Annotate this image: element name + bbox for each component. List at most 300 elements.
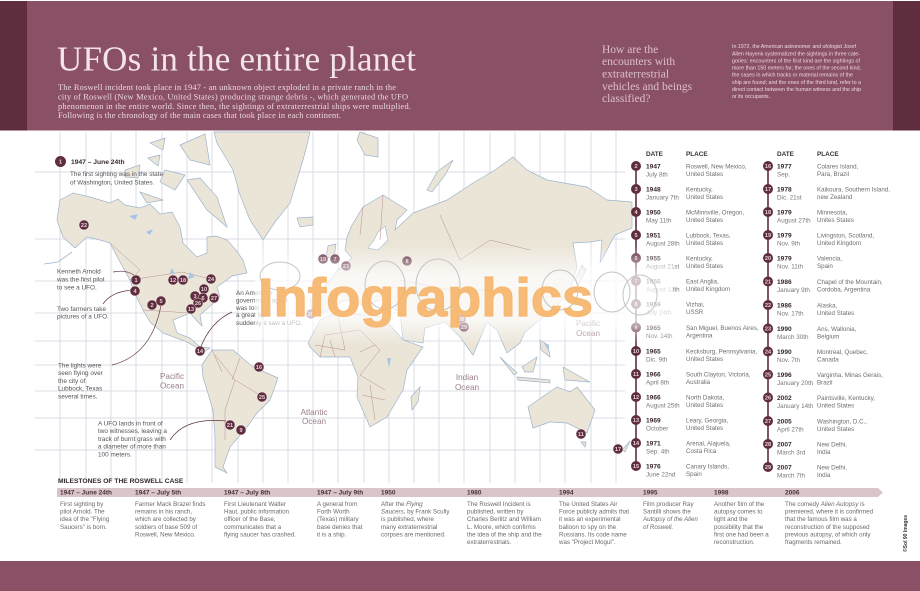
milestone text 7 bbox=[558, 501, 629, 546]
timeline: column two: 26 bbox=[765, 396, 771, 402]
milestone text 5: After the Flying bbox=[381, 501, 423, 508]
image credit: ©Sol 90 Images bbox=[902, 515, 909, 552]
timeline: column one: United States bbox=[686, 402, 723, 409]
milestone text 4: base denies that bbox=[317, 524, 363, 531]
milestone text 7: The United States Air bbox=[559, 501, 617, 508]
Southeast Asia islands bbox=[500, 265, 590, 383]
Aleutian chain bbox=[44, 252, 72, 264]
timeline: column two: Varginha, Minas Gerais, bbox=[817, 372, 883, 379]
timeline: column one: United States bbox=[686, 194, 723, 201]
map markers: 5 bbox=[159, 299, 163, 305]
timeline: column two: New Delhi, bbox=[817, 464, 847, 472]
map markers: 19 bbox=[320, 257, 326, 263]
timeline: column one: Dic. 9th bbox=[646, 356, 668, 364]
milestone text 5: corpses are mentioned. bbox=[381, 532, 446, 538]
milestone text 2: which are collected by bbox=[134, 516, 197, 523]
Africa bbox=[308, 312, 423, 427]
timeline: column one: Sep. 4th bbox=[646, 448, 670, 456]
callout: Kenneth Arnold: Kenneth Arnold bbox=[57, 268, 101, 276]
milestone text 2: Roswell, New Mexico. bbox=[135, 532, 196, 538]
timeline: column two: March 30th bbox=[777, 334, 809, 341]
callout: burnt grass: a diameter of more than bbox=[98, 444, 166, 450]
callout: Lubbock lights: Lubbock, Texas bbox=[58, 386, 102, 392]
subheading question bbox=[602, 44, 693, 105]
timeline: column two: Belgium bbox=[817, 334, 839, 340]
timeline: column one: East Anglia, bbox=[686, 278, 719, 286]
milestone text 2: remains in his ranch, bbox=[135, 508, 192, 516]
milestone text 1 bbox=[60, 501, 110, 531]
milestones of the Roswell case: 1947 – July 8th bbox=[224, 490, 270, 496]
milestone text 10: premiered, where it is confirmed bbox=[785, 508, 874, 516]
milestone text 6: the idea of the ship and the bbox=[467, 532, 542, 538]
timeline: column one: 1955 bbox=[646, 256, 661, 262]
timeline: column two: Nov. 17th bbox=[777, 310, 804, 318]
callout: burnt grass bbox=[98, 420, 226, 458]
milestone text 3: officer of the Base, bbox=[224, 516, 276, 523]
timeline: column one: Argentina bbox=[686, 332, 713, 340]
timeline: column two: 1978 bbox=[777, 186, 792, 194]
timeline: column one: Spain bbox=[686, 471, 702, 478]
timeline: column two: Chapel of the Mountain, bbox=[817, 279, 883, 286]
timeline: column two: Alaska, bbox=[817, 302, 838, 310]
callout: burnt grass: A UFO lands in front of bbox=[98, 420, 163, 428]
timeline: column one: United States bbox=[686, 240, 723, 247]
timeline: column two: 1979 bbox=[777, 256, 792, 262]
timeline: column two: Nov. 11th bbox=[777, 264, 804, 270]
timeline: column two: January 9th bbox=[777, 287, 810, 294]
map markers: 13 bbox=[188, 307, 194, 313]
timeline: column two: new Zealand bbox=[817, 194, 853, 201]
Greenland bbox=[214, 132, 310, 240]
Madagascar bbox=[411, 387, 420, 410]
timeline: column one: 13 bbox=[633, 418, 639, 424]
timeline: column two: 1986 bbox=[777, 279, 792, 286]
timeline: column one: Arenal, Alajuela, bbox=[686, 440, 731, 448]
timeline: column two: Minnesota, bbox=[817, 210, 848, 216]
timeline: column two: March 7th bbox=[777, 472, 805, 480]
milestone text 10 bbox=[785, 501, 874, 546]
timeline: column one: 12 bbox=[633, 395, 639, 401]
timeline: column two: United States bbox=[817, 310, 854, 317]
timeline: column one: McMinnville, Oregon, bbox=[686, 210, 744, 216]
panel: header banner bbox=[0, 1, 920, 130]
timeline: column two: Kaikoura, Southern Island, bbox=[817, 186, 890, 194]
timeline: column two: 1979 bbox=[777, 210, 792, 216]
map markers: 3 bbox=[193, 294, 197, 300]
subheading question: encounters with bbox=[602, 56, 675, 68]
timeline: column two: August 27th bbox=[777, 218, 811, 224]
timeline: column two: 16 bbox=[765, 164, 771, 170]
callout: burnt grass: 100 meters. bbox=[98, 452, 132, 458]
milestone text 8: of Roswell. bbox=[643, 524, 673, 531]
timeline: column two: 21 bbox=[765, 280, 771, 286]
timeline: column two: Paintsville, Kentucky, bbox=[817, 395, 875, 402]
milestones of the Roswell case: 1947 – June 24th bbox=[60, 490, 112, 496]
timeline: column one: 1969 bbox=[646, 418, 661, 424]
milestone text 9: first one had been a bbox=[714, 532, 769, 538]
timeline: column one: January 7th bbox=[646, 194, 679, 202]
timeline: column one: United Kingdom bbox=[686, 286, 730, 293]
timeline: column two: 19 bbox=[765, 233, 771, 239]
milestone text 6 bbox=[467, 501, 542, 546]
timeline: column two: Montreal, Quebec, bbox=[817, 349, 868, 356]
Baltic Sea bbox=[368, 226, 388, 250]
intro text: Following is the chronology of the main cases that took place in each continent. bbox=[58, 111, 341, 120]
milestone text 8 bbox=[642, 501, 698, 531]
callout: first sighting: 1 bbox=[59, 160, 62, 166]
map markers: 10 bbox=[201, 287, 207, 293]
North America bbox=[57, 193, 247, 352]
milestone text 3: flying saucer has crashed. bbox=[224, 532, 296, 538]
timeline: column one: October bbox=[646, 426, 668, 432]
milestone text 9: light and the bbox=[714, 516, 748, 523]
ocean labels: Ocean bbox=[455, 383, 480, 392]
timeline: column two: Livingston, Scotland, bbox=[817, 232, 874, 240]
milestone text 2: soldiers of base 509 of bbox=[135, 524, 198, 531]
subheading question: extraterrestrial bbox=[602, 68, 669, 80]
milestones of the Roswell case: 1950 bbox=[381, 490, 396, 496]
timeline: column two: 25 bbox=[765, 372, 771, 378]
milestone text 1: idea of the "Flying bbox=[60, 516, 110, 523]
classification text: In 1972, the American astronomer and ufologist Josef bbox=[732, 44, 857, 50]
timeline: column two: Unites States bbox=[817, 217, 854, 224]
callout: first sighting bbox=[55, 156, 164, 186]
timeline: column one: 8 bbox=[634, 302, 638, 308]
callout: first sighting: 1947 – June 24th bbox=[71, 159, 125, 166]
callout: first sighting: The first sighting was in the state bbox=[70, 171, 164, 178]
timeline: column two: DATE bbox=[777, 151, 795, 158]
timeline: column one: North Dakota, bbox=[686, 394, 724, 402]
timeline: column two: 1996 bbox=[777, 372, 792, 379]
timeline: column one: July 8th bbox=[646, 172, 668, 178]
timeline: column one: United States bbox=[686, 263, 723, 270]
timeline: column one: 11 bbox=[633, 372, 639, 378]
Eurasia bbox=[310, 157, 632, 355]
classification text: more than 150 meters far; the ones of the second kind, bbox=[732, 66, 861, 72]
timeline: column one: 3 bbox=[634, 187, 638, 193]
timeline: column two: United States bbox=[817, 426, 854, 433]
timeline: column one: Canary Islands, bbox=[686, 464, 729, 470]
map markers: 25 bbox=[259, 395, 265, 401]
world map bbox=[35, 132, 632, 483]
classification text: ship are found; and the ones of the third kind, refer to a bbox=[732, 80, 861, 86]
timeline: column one: 1966 bbox=[646, 372, 661, 378]
map markers: 22 bbox=[81, 223, 87, 229]
milestone text 4 bbox=[317, 501, 363, 538]
timeline: column one: 6 bbox=[634, 256, 638, 262]
timeline: column one: DATE bbox=[646, 151, 664, 158]
callout: American agent: a great light bbox=[236, 312, 270, 319]
map callouts bbox=[55, 156, 302, 458]
subheading question: How are the bbox=[602, 44, 658, 56]
timeline: column one: Kentucky, bbox=[686, 186, 713, 194]
map markers: 23 bbox=[343, 264, 349, 270]
map markers: 14 bbox=[197, 349, 204, 355]
subheading question: classified? bbox=[602, 93, 651, 105]
callout: burnt grass: two witnesses, leaving a bbox=[98, 428, 167, 435]
classification text: gories: encounters of the first kind are the sightings of bbox=[732, 58, 861, 64]
milestone text 1: Saucers" is born. bbox=[60, 524, 107, 531]
map markers bbox=[79, 220, 623, 454]
timeline: column two: United Kingdom bbox=[817, 240, 861, 247]
milestone text 9: possibility that the bbox=[714, 524, 764, 531]
milestones of the Roswell case: 1998 bbox=[714, 490, 729, 496]
timeline: column one: Kentucky, bbox=[686, 256, 713, 262]
milestone text 3: Haut, public information bbox=[224, 508, 290, 516]
milestone text 3: communicates that a bbox=[224, 524, 282, 531]
timeline: column one: 2 bbox=[634, 164, 638, 170]
callout: American agent: suddenly it saw a UFO. bbox=[236, 320, 302, 327]
Lakes bbox=[129, 214, 549, 368]
map markers: 11 bbox=[578, 432, 584, 438]
timeline: column one: April 8th bbox=[646, 380, 670, 386]
callout: Lubbock lights: several times. bbox=[58, 394, 98, 400]
milestones of the Roswell case: 1947 – July 9th bbox=[317, 490, 363, 496]
timeline: column one: 4 bbox=[634, 210, 638, 216]
map markers: 26 bbox=[195, 301, 201, 307]
timeline: column one: PLACE bbox=[686, 151, 708, 158]
milestone text 9: reconstruction. bbox=[714, 539, 755, 546]
map markers: 17 bbox=[615, 447, 621, 453]
callout: two farmers: Two farmers take bbox=[57, 306, 106, 313]
timeline: column one: Australia bbox=[686, 379, 711, 386]
milestone text 8: Film producer Ray bbox=[643, 501, 694, 508]
timeline: column one: South Clayton, Victoria, bbox=[686, 372, 751, 378]
milestones of the Roswell case: 1995 bbox=[643, 490, 658, 496]
timeline: column two: 28 bbox=[765, 442, 771, 448]
timeline: column one: 1976 bbox=[646, 464, 661, 470]
timeline: column two: 24 bbox=[765, 350, 772, 356]
classification text: Allen Hayenk systematized the sightings in three cate- bbox=[732, 52, 860, 58]
intro text: The Roswell incident took place in 1947 - an unknown object exploded in a private ranch in the bbox=[58, 83, 396, 92]
timeline: column one bbox=[631, 151, 759, 478]
timeline: column two: Spain bbox=[817, 263, 833, 270]
timeline: column one: 7 bbox=[634, 279, 638, 285]
timeline: column two: 1977 bbox=[777, 164, 792, 170]
milestones heading: MILESTONES OF THE ROSWELL CASE bbox=[58, 478, 184, 485]
timeline: column one: United States bbox=[686, 356, 723, 363]
ocean labels bbox=[160, 319, 601, 426]
callout: Kenneth Arnold bbox=[56, 268, 136, 292]
milestone text 6: Charles Berlitz and William bbox=[467, 516, 541, 523]
timeline: column two: January 14th bbox=[777, 403, 814, 410]
timeline: column two: 17 bbox=[765, 187, 771, 193]
milestones of the Roswell case: 2006 bbox=[785, 490, 800, 496]
Arctic islands bbox=[125, 132, 378, 227]
milestone text 5 bbox=[381, 501, 450, 538]
timeline: column one: 1951 bbox=[646, 232, 661, 240]
milestone text 7: balloon to spy on the bbox=[559, 524, 617, 531]
South America bbox=[202, 350, 278, 473]
timeline: column one: 1948 bbox=[646, 186, 661, 194]
classification text: the cases in which tracks or material remains of the bbox=[732, 72, 853, 78]
timeline: column two: January 20th bbox=[777, 380, 814, 387]
ocean labels: Pacific bbox=[160, 372, 184, 381]
callout: American agent: An American bbox=[236, 290, 273, 297]
milestone text 6: extraterrestrials. bbox=[467, 539, 512, 546]
timeline: column two: Canada bbox=[817, 356, 839, 364]
timeline: column two: New Delhi, bbox=[817, 442, 847, 448]
timeline: column two: Brazil bbox=[817, 380, 832, 386]
timeline: column two: 2007 bbox=[777, 464, 792, 472]
callout: first sighting: of Washington, United States. bbox=[70, 180, 155, 186]
milestone text 1: First sighting by bbox=[60, 501, 104, 508]
milestone text 10: reconstruction of the supposed bbox=[785, 524, 870, 531]
callout: Kenneth Arnold: to see a UFO. bbox=[57, 284, 97, 292]
timeline: column two: 1979 bbox=[777, 232, 792, 240]
map markers: 12 bbox=[170, 278, 176, 284]
timeline: column one: 1959 bbox=[646, 302, 661, 308]
classification text: direct contact between the human witness and the ship bbox=[732, 87, 861, 93]
watermark bbox=[255, 245, 673, 345]
milestone text 10: previous autopsy, of which only bbox=[785, 532, 871, 538]
milestone text 6: The Roswell Incident is bbox=[467, 501, 531, 508]
map markers: 6 bbox=[201, 296, 205, 302]
watermark: Infographics bbox=[258, 268, 593, 328]
ocean labels: Pacific bbox=[576, 319, 600, 328]
classification text: or its occupants. bbox=[732, 94, 770, 100]
timeline: column one: Kecksburg, Pennsylvania, bbox=[686, 348, 757, 356]
timeline: column one: Vizhai, bbox=[686, 302, 705, 308]
milestone text 7: Russians. Its code name bbox=[559, 532, 627, 538]
timeline: column two: Valencia, bbox=[817, 256, 842, 262]
timeline: column one: 1965 bbox=[646, 348, 661, 356]
map markers: 9 bbox=[239, 428, 243, 434]
Australia and New Zealand bbox=[528, 387, 630, 452]
map markers: 20 bbox=[308, 312, 314, 318]
timeline: column one: 1950 bbox=[646, 210, 661, 216]
timeline: column one: Nov. 14th bbox=[646, 333, 673, 340]
milestones of the Roswell case bbox=[57, 478, 883, 546]
map markers: 28 bbox=[458, 317, 464, 323]
timeline: column two: PLACE bbox=[817, 151, 839, 158]
timeline: column one: August 28th bbox=[646, 240, 680, 248]
timeline: column two: India bbox=[817, 449, 831, 456]
timeline: column one: May 11th bbox=[646, 218, 672, 224]
milestone text 5: is published, where bbox=[381, 516, 435, 523]
timeline: column two: 18 bbox=[765, 210, 771, 216]
callout: burnt grass: track of burnt grass with bbox=[98, 436, 166, 443]
ocean labels: Ocean bbox=[576, 329, 601, 338]
timeline: column two: Washington, D.C., bbox=[817, 418, 867, 426]
ocean labels: Indian bbox=[456, 373, 479, 382]
milestone text 10: The comedy Alien Autopsy is bbox=[785, 501, 865, 508]
timeline: column two: Ans, Wallonia, bbox=[817, 326, 857, 333]
timeline: column two: 27 bbox=[765, 419, 771, 425]
map markers: 1 bbox=[134, 278, 138, 284]
timeline: column one: Costa Rica bbox=[686, 448, 717, 455]
milestone text 5: Saucers, by Frank Scully bbox=[381, 508, 450, 516]
milestone text 9 bbox=[714, 501, 769, 546]
timeline: column one: USSR bbox=[686, 309, 704, 316]
milestone text 7: Force publicly admits that bbox=[559, 508, 629, 516]
timeline: column two: April 27th bbox=[777, 426, 804, 434]
callout: two farmers bbox=[57, 290, 134, 320]
milestone text 2: Farmer Mack Brazel finds bbox=[135, 501, 206, 508]
timeline: column two: 20 bbox=[765, 256, 771, 262]
map markers: 4 bbox=[133, 289, 137, 295]
callout: American agent: was told by bbox=[235, 305, 269, 312]
timeline: column two: 23 bbox=[765, 326, 771, 332]
milestone text 8: Autopsy of the Alien bbox=[642, 516, 698, 523]
timeline: column one: 5 bbox=[634, 233, 638, 239]
milestone text 10: that the famous film was a bbox=[785, 516, 857, 523]
timeline: column two: 1990 bbox=[777, 349, 792, 356]
milestone text 10: fragments remained. bbox=[785, 539, 842, 546]
footer band bbox=[0, 561, 920, 591]
milestone text 7: it was an experimental bbox=[559, 516, 621, 523]
intro text: city of Roswell (New Mexico, United States) producing strange debris -, which generated the UFO bbox=[58, 92, 408, 102]
timeline: column one: 1966 bbox=[646, 394, 661, 402]
timeline: column two: March 3rd bbox=[777, 450, 806, 456]
timeline: column two: 2007 bbox=[777, 442, 792, 448]
milestone text 8: Santilli shows the bbox=[643, 508, 691, 516]
intro text bbox=[58, 83, 411, 120]
timeline: column one: July 24th bbox=[646, 310, 672, 316]
milestone text 2 bbox=[134, 501, 206, 538]
timeline: column one: 1947 bbox=[646, 164, 661, 170]
map markers: 16 bbox=[256, 365, 262, 371]
timeline: column one: Leary, Georgia, bbox=[686, 418, 728, 424]
milestone text 4: A general from bbox=[317, 501, 357, 508]
timeline: column one: San Miguel, Buenos Aires, bbox=[686, 325, 759, 332]
callout: American agent: government agent bbox=[236, 298, 288, 304]
milestone text 9: autopsy comes to bbox=[714, 508, 763, 516]
intro text: phenomenon in the entire world. Since then, the sightings of extraterrestrial ships were multiplied. bbox=[58, 102, 411, 111]
classification text bbox=[732, 44, 861, 100]
callout: Kenneth Arnold: was the first pilot bbox=[56, 276, 105, 284]
timeline: column two: Dic. 21st bbox=[777, 194, 802, 202]
timeline: column two: United States bbox=[817, 402, 854, 410]
milestone text 3 bbox=[224, 501, 296, 538]
timeline: column one: 1965 bbox=[646, 325, 661, 332]
timeline: column one: United States bbox=[686, 217, 723, 224]
timeline: column two: 2005 bbox=[777, 418, 792, 426]
Country borders bbox=[110, 195, 530, 440]
timeline: column two: 29 bbox=[765, 465, 771, 471]
ocean labels: Ocean bbox=[302, 417, 327, 426]
map markers: 27 bbox=[211, 296, 217, 302]
callout: Lubbock lights: the city of bbox=[58, 378, 86, 385]
title: UFOs in the entire planet bbox=[57, 40, 416, 78]
callout: Lubbock lights bbox=[58, 305, 161, 400]
timeline: column one: Lubbock, Texas, bbox=[686, 232, 731, 240]
milestone text 4: it is a ship. bbox=[317, 532, 347, 538]
timeline: column one: United States bbox=[686, 425, 723, 432]
timeline: column two: Cordoba, Argentina bbox=[817, 286, 871, 294]
callout: two farmers: pictures of a UFO. bbox=[57, 314, 109, 320]
timeline: column two: Sep. bbox=[777, 172, 790, 178]
milestone text 1: pilot Arnold. The bbox=[60, 508, 105, 516]
timeline: column two bbox=[763, 151, 890, 480]
timeline: column one: 14 bbox=[633, 441, 640, 447]
timeline: column one: 10 bbox=[633, 349, 639, 355]
timeline: column two: 2002 bbox=[777, 395, 792, 402]
milestones of the Roswell case: 1980 bbox=[467, 490, 482, 496]
map markers: 21 bbox=[227, 423, 233, 429]
timeline: column two: 1986 bbox=[777, 302, 792, 310]
timeline: column one: 1956 bbox=[646, 278, 661, 286]
milestone text 4: Forth Worth bbox=[317, 508, 350, 516]
map markers: 8 bbox=[405, 259, 409, 265]
ocean labels: Ocean bbox=[160, 382, 185, 390]
timeline: column two: India bbox=[817, 472, 831, 479]
timeline: column one: 1971 bbox=[646, 440, 661, 448]
milestone text 3: First Lieutenant Walter bbox=[224, 501, 286, 508]
milestones of the Roswell case: 1994 bbox=[559, 490, 574, 496]
timeline: column two: Para, Brazil bbox=[817, 171, 849, 178]
milestones of the Roswell case: 1947 – July 5th bbox=[135, 490, 181, 496]
